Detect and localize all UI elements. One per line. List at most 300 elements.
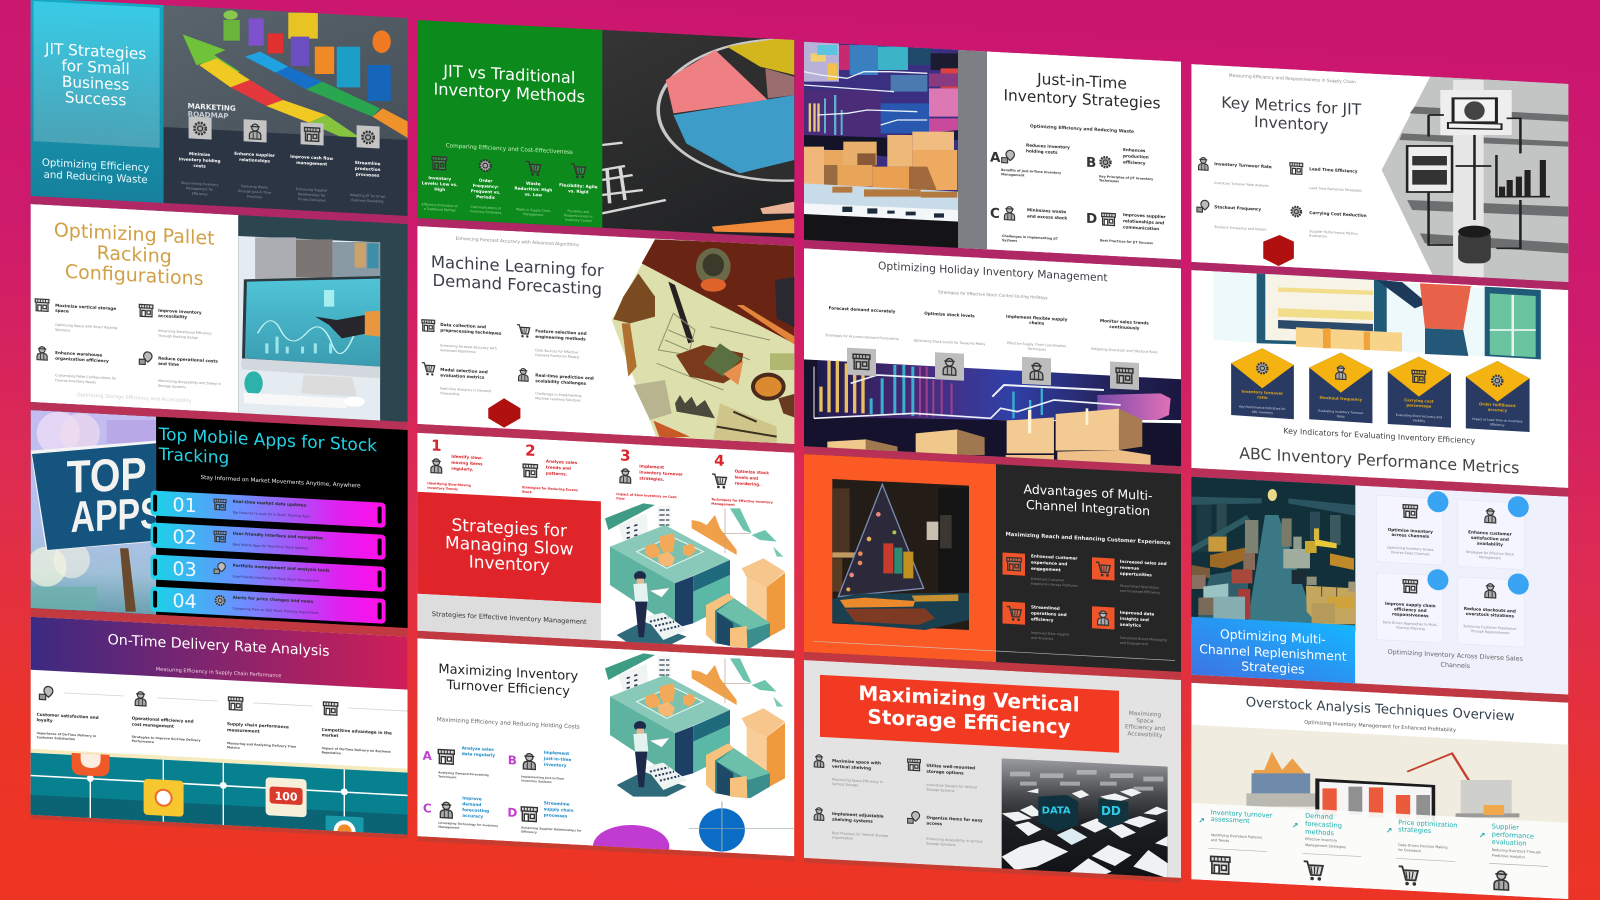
title: Configurations xyxy=(65,261,204,290)
card 3: Improve supply chain xyxy=(1385,601,1436,608)
storage points: Utilize well-mounted xyxy=(926,763,975,770)
roadmap points: Streamlining Inventory xyxy=(181,181,218,187)
timeline points: Operational efficiency and xyxy=(132,716,194,724)
card 4 xyxy=(1457,570,1529,648)
subtitle: Optimizing Efficiency and Reducing Waste xyxy=(1030,123,1134,135)
benefit points: Optimizing Space with Smart Racking xyxy=(55,323,117,330)
lettered points: Minimizes waste xyxy=(1027,207,1066,214)
technique columns: methods xyxy=(1305,828,1335,837)
column headings: Mitigating Overstock and Stockout Risks xyxy=(1091,347,1158,354)
roadmap points: Relationships for xyxy=(298,192,326,198)
slide: On-Time Delivery Rate Analysis xyxy=(31,617,408,846)
numbered steps: Identifying Slow-Moving xyxy=(427,481,471,488)
slide: Advantages of Multi-Channel Integration xyxy=(804,454,1181,672)
title: Demand Forecasting xyxy=(433,271,602,299)
benefit points: Enhance warehouse xyxy=(55,350,102,357)
caption: Key Indicators for Evaluating Inventory Efficiency xyxy=(1283,426,1476,446)
lettered points: relationships and xyxy=(1123,218,1164,225)
slide: ABC Inventory Performance Metrics xyxy=(1191,253,1568,488)
lettered points: Management xyxy=(438,825,460,830)
timeline points: Importance of On-Time Delivery in xyxy=(37,731,96,738)
lettered points: Streamline xyxy=(544,800,570,807)
storage points: Innovative Designs for Vertical xyxy=(926,783,977,789)
column headings: Strategies for Accurate Demand Forecasting xyxy=(825,333,899,341)
lettered points: B xyxy=(508,753,517,768)
slide: JIT Strategies for Small Business Success xyxy=(31,0,408,216)
red panel xyxy=(417,492,601,603)
lettered points: Techniques xyxy=(1099,178,1119,183)
image: chalk pie chart xyxy=(602,38,794,234)
roadmap points: Management for xyxy=(186,186,214,192)
technique columns: performance xyxy=(1492,830,1534,841)
roadmap points: relationships xyxy=(239,157,271,164)
card 3: responsiveness xyxy=(1392,611,1429,618)
lettered points: inventory xyxy=(544,762,567,768)
ML steps: Forecasting xyxy=(440,391,459,396)
card 3: efficiency and xyxy=(1394,606,1427,613)
advantages: Experience Across Platforms xyxy=(1031,582,1078,588)
app bar 1: Real-time market data updates xyxy=(233,499,307,508)
card 4: overstock situations xyxy=(1466,611,1514,619)
title: Overstock Analysis Techniques Overview xyxy=(1246,695,1515,725)
app bar 2: User-friendly interface and navigation xyxy=(233,531,323,540)
comparison points: Efficiency Evaluation of xyxy=(422,202,458,208)
image: warehouse aisle xyxy=(1190,475,1355,632)
KPI text: Evaluating Inventory Turnover xyxy=(1318,409,1363,415)
comparison points: Responsiveness in xyxy=(564,213,593,219)
title: Channel Integration xyxy=(1026,497,1150,518)
title: ABC Inventory Performance Metrics xyxy=(1239,444,1519,477)
numbered steps: 2 xyxy=(525,441,536,460)
title: Top Mobile Apps for Stock xyxy=(159,425,377,456)
image: data cubes xyxy=(1002,758,1168,878)
technique columns: ↗ xyxy=(1292,821,1298,830)
timeline points: Competitive advantage in the xyxy=(322,727,392,736)
technique columns: Price optimization xyxy=(1398,818,1457,830)
card 1: Optimizing Inventory Across xyxy=(1387,545,1434,552)
ML steps: Real-time Analytics in Demand xyxy=(440,387,491,393)
top subtitle: Enhancing Forecast Accuracy with Advanced Algorithms xyxy=(456,236,580,248)
storage points: Enhancing Accessibility in Vertical xyxy=(926,837,982,844)
title: Inventory xyxy=(1254,113,1329,135)
KPI text: Order fulfillment xyxy=(1479,401,1516,408)
comparison points: Order xyxy=(479,178,492,183)
advantages: opportunities xyxy=(1120,571,1152,577)
title: On-Time Delivery Rate Analysis xyxy=(108,632,330,660)
subtitle: Optimizing Inventory Management for Enhanced Profitability xyxy=(1304,720,1456,734)
technique columns: Inventory turnover xyxy=(1211,808,1273,820)
lettered points: production xyxy=(1123,153,1149,160)
subtitle: Stay Informed on Market Movements Anytime, Anywhere xyxy=(201,475,361,490)
title: for Small xyxy=(61,57,130,78)
metrics: Supplier Performance Metrics xyxy=(1309,229,1358,236)
title: JIT vs Traditional xyxy=(443,61,575,87)
column headings: Forecast demand accurately xyxy=(829,305,896,314)
benefit points: Reduce operational costs xyxy=(158,355,218,364)
slide: Optimizing Pallet Racking Configurations xyxy=(31,204,408,430)
lettered points: C xyxy=(990,206,1000,222)
advantages: and Increased Efficiency xyxy=(1120,589,1160,595)
title: Just-in-Time xyxy=(1037,70,1127,93)
image: analytics scene xyxy=(1191,725,1568,839)
technique columns: Management Strategies xyxy=(1305,843,1346,849)
numbered steps: 3 xyxy=(620,446,631,465)
app bar 2: Best Mobile Apps for Real-Time Stock Updates xyxy=(233,542,309,550)
numbered steps: inventory turnover xyxy=(639,469,683,477)
technique columns: forecasting xyxy=(1305,820,1342,830)
numbered steps: 4 xyxy=(714,451,725,470)
storage points: Organization xyxy=(832,835,853,841)
lettered points: Reduces inventory xyxy=(1026,142,1070,150)
card 4: Reduce stockouts and xyxy=(1464,606,1516,614)
KPI cards xyxy=(1231,348,1530,432)
numbered steps: Implement xyxy=(639,463,664,470)
gradient header xyxy=(31,617,408,690)
roadmap points: Timely Deliveries xyxy=(296,197,326,203)
numbered steps: Stock xyxy=(522,490,533,494)
slide: Strategies for Managing Slow Inventory xyxy=(417,433,794,658)
roadmap points: inventory holding xyxy=(179,156,220,164)
side subtitle: Space xyxy=(1136,718,1154,725)
roadmap label: ROADMAP xyxy=(188,109,229,120)
slide: Optimizing Holiday Inventory Management xyxy=(804,248,1182,493)
column headings: chains xyxy=(1029,320,1045,326)
title: Strategies xyxy=(1241,658,1305,677)
storage points: shelving systems xyxy=(832,817,873,824)
red hexagon xyxy=(1263,235,1294,266)
card 2: availability xyxy=(1477,541,1503,547)
dark lower panel xyxy=(164,127,408,216)
image: marketing roadmap xyxy=(183,10,408,138)
lettered points: C xyxy=(423,801,432,816)
lettered points: D xyxy=(507,806,517,820)
card 4: Through Replenishment xyxy=(1469,629,1510,635)
image: charts and boxes xyxy=(804,359,1182,473)
storage points: Maximizing Space Efficiency in xyxy=(832,777,883,784)
lettered points: Key Principles of JIT Inventory xyxy=(1099,174,1153,181)
advantages: analytics xyxy=(1120,622,1142,628)
title: Turnover Efficiency xyxy=(446,678,570,699)
lettered points: Implementing Just-in-Time xyxy=(521,775,564,781)
metrics: Inventory Turnover Rate Analysis xyxy=(1214,181,1269,188)
lettered points: B xyxy=(1086,155,1096,171)
timeline points: Customer Satisfaction xyxy=(37,735,75,741)
timeline points: measurement xyxy=(227,727,260,734)
technique columns: for Overstock xyxy=(1398,848,1421,853)
app bar 2 xyxy=(151,522,386,560)
metrics: Lead Time Reduction Strategies xyxy=(1309,186,1362,193)
KPI text: Efficiency xyxy=(1490,422,1505,427)
comparison points: a Traditional Method xyxy=(424,207,456,212)
image: data cubes: DATA xyxy=(1042,805,1071,816)
benefit points: Maximize vertical storage xyxy=(55,303,116,311)
numbered steps: Optimize stock xyxy=(735,469,769,475)
technique columns: Predictive Analytics xyxy=(1492,854,1525,859)
lettered points: Analyze sales xyxy=(462,745,494,752)
roadmap points: Streamline xyxy=(355,160,380,166)
card 1: across channels xyxy=(1391,532,1430,539)
lettered points: Enhances xyxy=(1123,147,1145,153)
KPI text xyxy=(1239,389,1523,428)
KPI text: accuracy xyxy=(1488,407,1507,413)
storage points: Vertical Storage xyxy=(832,782,858,787)
slide: Overstock Analysis Techniques Overview xyxy=(1191,683,1568,899)
benefit points: organization efficiency xyxy=(55,356,109,363)
numbered steps: Inventory Trends xyxy=(427,486,458,491)
numbered steps: trends and xyxy=(546,465,571,471)
image: analyst at monitor xyxy=(238,236,380,421)
KPI text: Impact of Lead Time on Inventory xyxy=(1472,417,1523,424)
app bar 1 xyxy=(151,490,386,528)
slide: JIT vs Traditional Inventory Methods xyxy=(417,20,794,238)
lettered points: Improve xyxy=(462,795,482,801)
image: data diagram xyxy=(1382,77,1569,283)
ML steps: Enhancing Forecast Accuracy with xyxy=(440,344,497,351)
lettered points: Analyzing Demand Forecasting xyxy=(438,770,489,777)
advantages: Streamlined xyxy=(1031,604,1060,611)
timeline points: Customer satisfaction and xyxy=(37,712,99,720)
advantages xyxy=(1002,552,1167,647)
lettered points: Systems xyxy=(1002,238,1017,243)
side subtitle: Maximizing xyxy=(1129,711,1161,719)
numbered steps: Flow xyxy=(616,496,625,501)
comparison points: Cost Implications of xyxy=(470,205,501,210)
side subtitle: Efficiency and xyxy=(1125,724,1165,732)
comparison points: High xyxy=(434,187,445,192)
comparison points: Reduction: High xyxy=(514,186,552,193)
benefit points: Through Racking Design xyxy=(157,334,198,340)
card 2: satisfaction and xyxy=(1471,535,1509,542)
ML steps: Data collection and xyxy=(440,322,486,329)
green panel xyxy=(417,20,602,228)
red title banner xyxy=(820,675,1119,753)
ML steps: Advanced Algorithms xyxy=(440,348,476,354)
ML steps: preprocessing techniques xyxy=(440,328,502,336)
numbered steps: patterns. xyxy=(546,471,568,477)
benefit points: Enhancing Warehouse Efficiency xyxy=(158,329,212,336)
title: Maximizing Vertical xyxy=(858,681,1080,717)
app bar 1: Top Features to Look for in Stock Tracking Apps xyxy=(232,510,311,519)
advantages: Streamlined Operations xyxy=(1120,584,1159,590)
comparison points: Levels: Low vs. xyxy=(422,180,458,187)
KPI text: Ratio xyxy=(1337,414,1345,419)
numbered steps: reordering. xyxy=(735,481,761,487)
lettered points: communication xyxy=(1123,224,1159,231)
storage points: Storage Systems xyxy=(926,787,955,793)
app bar 4: Comparing Free vs. Paid Stock Tracking Applications xyxy=(233,606,319,615)
storage points: Maximize space with xyxy=(832,758,881,766)
lettered points: efficiency xyxy=(1123,159,1146,166)
title: Machine Learning for xyxy=(431,252,604,280)
subtitle: Maximizing Efficiency and Reducing Holding Costs xyxy=(437,717,580,731)
icons row xyxy=(189,116,380,148)
lettered points: Improves supplier xyxy=(1123,212,1166,219)
subtitle: Measuring Efficiency in Supply Chain Performance xyxy=(156,667,281,679)
numbered steps: strategies. xyxy=(639,475,665,482)
roadmap points: Business Scalability xyxy=(351,198,384,204)
lettered points: Benefits of Just-in-Time Inventory xyxy=(1001,168,1061,175)
ML steps: engineering methods xyxy=(535,334,586,342)
title: Success xyxy=(65,88,126,110)
column headings: Optimizing Stock Levels for Seasonal Peaks xyxy=(914,338,985,346)
KPI text: Carrying cost xyxy=(1404,397,1434,404)
black panel xyxy=(156,417,408,628)
app bar 4 xyxy=(151,586,386,624)
technique columns: Reducing Overstock Through xyxy=(1492,848,1541,855)
roadmap points: Enhancing Supplier xyxy=(296,187,328,193)
ML steps: Model selection and xyxy=(440,367,488,374)
lettered points: supply chain xyxy=(544,806,574,813)
storage points xyxy=(814,754,983,848)
title: Channel Replenishment xyxy=(1199,641,1347,664)
numbered steps: Identify slow- xyxy=(451,454,483,460)
comparison points: Frequent vs. xyxy=(471,188,501,195)
roadmap points: Enhance supplier xyxy=(234,151,275,158)
advantages: Improved Data Insights xyxy=(1031,631,1069,637)
roadmap points: Adapting JIT for Small xyxy=(350,193,385,199)
lettered points: Implement xyxy=(544,750,569,756)
app bar 3: Portfolio management and analysis tools xyxy=(233,563,330,573)
ML steps: evaluation metrics xyxy=(440,373,485,380)
comparison points: Waste in Supply Chain xyxy=(516,207,551,213)
image: top apps sign xyxy=(27,405,163,619)
numbered steps: Analyze sales xyxy=(546,459,577,465)
benefit points: Maximizing Accessibility and Safety in xyxy=(158,379,221,386)
comparison points: Inventory Control xyxy=(565,218,592,223)
caption: Channels xyxy=(1441,661,1471,670)
subtitle: Optimizing Efficiency xyxy=(42,158,149,174)
lettered points: Inventory Systems xyxy=(521,779,552,784)
technique columns: Data-Driven Decision Making xyxy=(1398,843,1448,850)
comparison points: vs. Low xyxy=(524,192,542,198)
image: top apps sign: APPS xyxy=(71,489,163,542)
title: Maximizing Inventory xyxy=(438,662,578,684)
technique columns: strategies xyxy=(1398,825,1432,835)
column headings: Techniques xyxy=(1027,347,1046,352)
lower translucent panel xyxy=(1191,803,1568,899)
comparison points: Inventory xyxy=(428,175,451,181)
teal title panel xyxy=(34,1,160,148)
red hexagon xyxy=(488,398,520,428)
roadmap points: Improve cash flow xyxy=(290,154,333,161)
grey footer panel xyxy=(417,594,601,640)
advantages: Consistent Brand Messaging xyxy=(1120,636,1167,642)
metrics: Stockout Frequency and Impact xyxy=(1214,225,1267,232)
storage points: Best Practices for Vertical Storage xyxy=(832,831,888,838)
side subtitle: Accessibility xyxy=(1128,731,1163,739)
card 2: Enhance customer xyxy=(1468,529,1512,537)
numbered steps: 1 xyxy=(431,436,442,455)
title: Tracking xyxy=(158,445,229,469)
ML steps xyxy=(422,320,594,403)
title: Key Metrics for JIT xyxy=(1221,94,1361,119)
roadmap points: Practices xyxy=(247,194,262,199)
image: isometric warehouse xyxy=(605,644,785,808)
lettered points: holding costs xyxy=(1026,148,1058,155)
card 1: Optimize inventory xyxy=(1388,527,1433,534)
decorative circles xyxy=(593,802,794,868)
image: teal timeline with icons: 100 xyxy=(275,790,298,804)
advantages: experience and xyxy=(1031,560,1067,566)
card 2 xyxy=(1457,493,1529,570)
image: isometric warehouse xyxy=(605,494,785,658)
technique columns: ↗ xyxy=(1198,816,1205,825)
timeline points: Measuring and Analyzing Delivery Time xyxy=(227,741,296,749)
numbered steps: regularly. xyxy=(451,466,474,472)
metrics: Stockout Frequency xyxy=(1214,204,1261,212)
caption: Optimizing Inventory Across Diverse Sales xyxy=(1388,648,1523,663)
lettered points: forecasting xyxy=(462,807,489,813)
card 1 xyxy=(1376,488,1448,566)
timeline points: Impact of On-Time Delivery on Business xyxy=(322,746,391,754)
timeline points: Strategies to Improve On-Time Delivery xyxy=(132,735,201,742)
grey band xyxy=(958,50,987,249)
roadmap points: processes xyxy=(356,172,380,178)
roadmap points: Efficiency xyxy=(192,192,208,196)
slide: Maximizing Inventory Turnover Efficiency xyxy=(417,634,794,879)
title: JIT Strategies xyxy=(45,40,146,63)
storage points: storage options xyxy=(926,769,964,776)
KPI text: ABC Inventory xyxy=(1252,410,1273,415)
image: top apps sign: TOP xyxy=(67,447,147,503)
lettered points: A xyxy=(423,749,433,763)
advantages: Improved data xyxy=(1120,610,1154,617)
timeline points: Performance xyxy=(132,739,154,744)
title: Advantages of Multi- xyxy=(1024,481,1152,503)
technique columns: Identifying Overstock Patterns xyxy=(1211,833,1262,840)
blue title panel xyxy=(1191,617,1355,683)
subtitle: Maximizing Reach and Enhancing Customer Experience xyxy=(1006,532,1171,546)
comparison points: Waste xyxy=(526,181,541,186)
lettered points: Challenges in Implementing JIT xyxy=(1002,234,1058,241)
lettered points: and excess stock xyxy=(1027,213,1067,221)
timeline points: loyalty xyxy=(37,717,53,723)
image: warehouse boxes and charts xyxy=(804,40,959,253)
lettered points: D xyxy=(1086,211,1097,227)
card 1: Diverse Sales Channels xyxy=(1391,550,1430,556)
numbered steps: Strategies for Reducing Excess xyxy=(522,485,578,492)
metrics xyxy=(1197,157,1367,241)
KPI text: Stockout frequency xyxy=(1319,395,1363,402)
storage points: Implement adjustable xyxy=(832,811,884,819)
title: Managing Slow xyxy=(445,533,574,560)
roadmap label: MARKETING xyxy=(188,101,236,113)
slide: Key Metrics for JIT Inventory xyxy=(1191,57,1569,293)
comparison points xyxy=(422,175,598,223)
ML steps: scalability challenges xyxy=(535,378,587,386)
metrics: Lead Time Efficiency xyxy=(1309,166,1358,174)
benefit points: Storage Systems xyxy=(158,384,186,389)
storage points: Storage Solutions xyxy=(926,841,956,847)
comparison points: Flexibility and xyxy=(568,209,589,214)
benefit points: accessibility xyxy=(158,313,187,320)
lettered points: processes xyxy=(544,812,568,819)
title: Strategies for xyxy=(452,516,567,542)
app bar 2: 02 xyxy=(173,526,197,549)
column headings xyxy=(825,303,1158,358)
advantages: Increased sales and xyxy=(1120,559,1167,566)
title: Optimizing Holiday Inventory Management xyxy=(878,259,1108,284)
app bar 1: 01 xyxy=(173,494,197,517)
comparison points: Frequency: xyxy=(473,183,499,189)
roadmap points: through Just-in-Time xyxy=(238,189,271,195)
title: Business xyxy=(62,73,129,94)
comparison points: Management xyxy=(523,212,544,217)
benefit points: Solutions xyxy=(55,328,71,333)
technique columns: and Trends xyxy=(1211,838,1229,843)
timeline points xyxy=(37,686,408,759)
image: desk with charts xyxy=(612,239,797,447)
